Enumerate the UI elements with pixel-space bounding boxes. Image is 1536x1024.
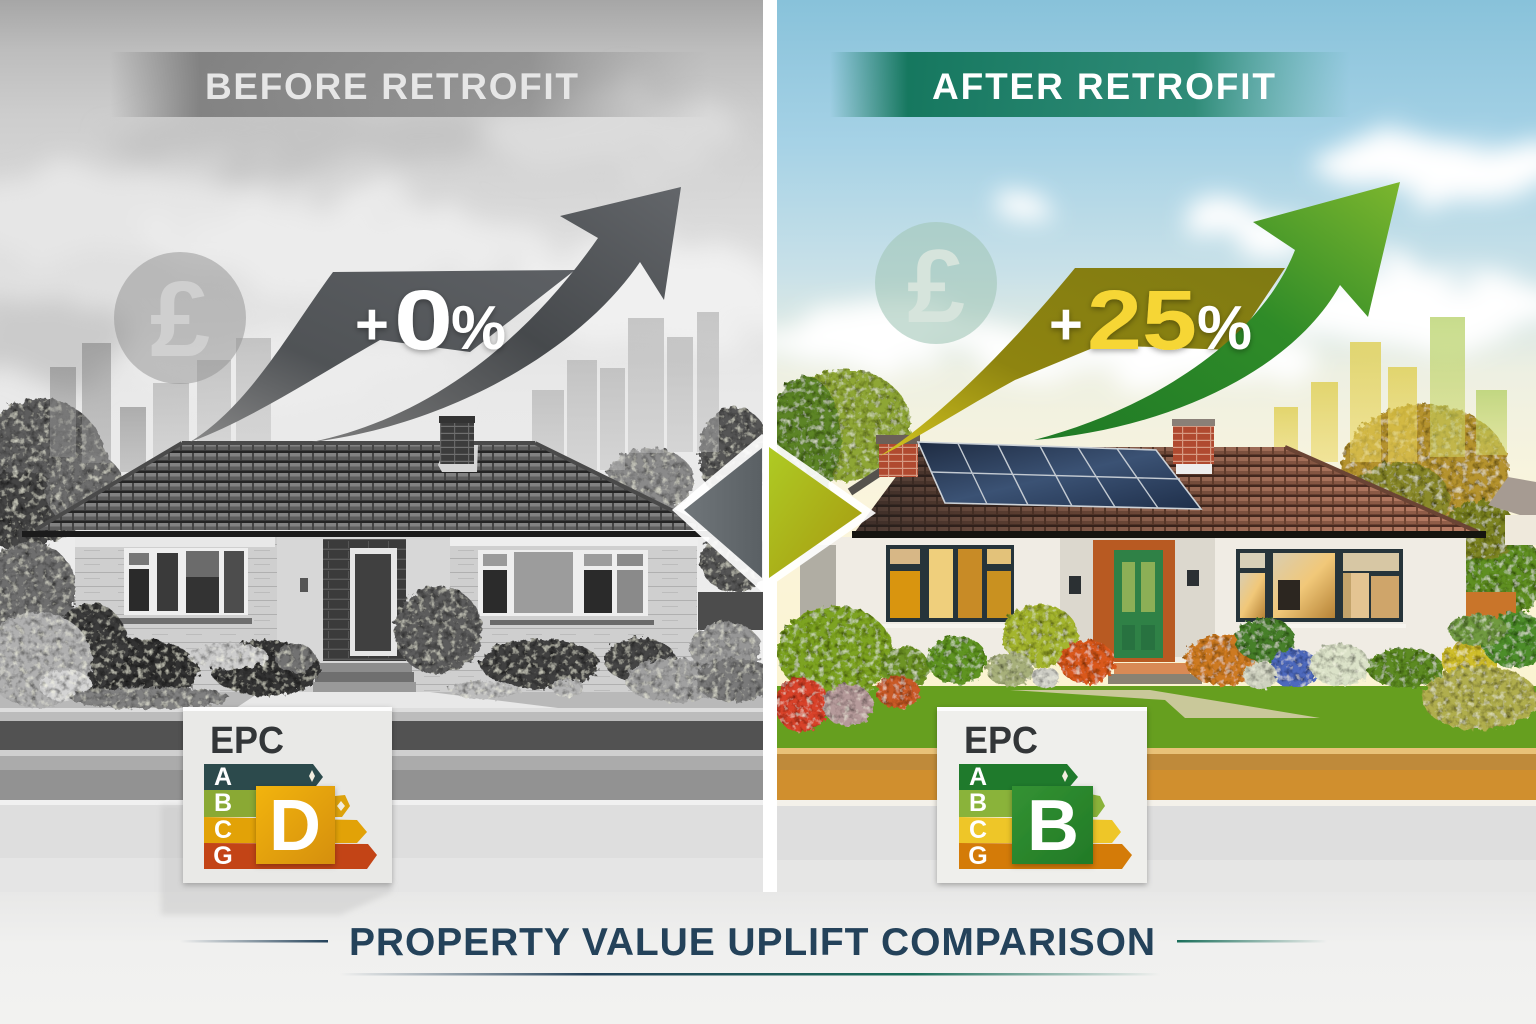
- panel header: after retrofit: AFTER RETROFIT: [932, 66, 1275, 107]
- left hip edge: [850, 447, 918, 492]
- bottom title strip background: [0, 892, 1536, 1024]
- wall lamp: [300, 578, 308, 592]
- card highlight: [937, 707, 1147, 711]
- flower beds: [775, 604, 1536, 732]
- panel header: before retrofit: [110, 52, 710, 117]
- rating bars: [204, 763, 377, 870]
- roof hip edge: [35, 443, 712, 530]
- rating badge D: [256, 786, 335, 866]
- upper ribbon: [880, 268, 1285, 456]
- EPC card: rating D: [183, 707, 392, 883]
- left sill: [882, 624, 1018, 628]
- pound coin icon: £: [150, 258, 210, 379]
- value label: [355, 273, 506, 367]
- soffit: [75, 537, 275, 547]
- right rule: [1177, 940, 1327, 942]
- green front door: [1114, 550, 1163, 658]
- panel: before retrofit: [0, 0, 780, 894]
- steps: [313, 663, 416, 692]
- side extension shade: [800, 545, 836, 620]
- rating badge B: [1012, 786, 1093, 866]
- fascia: [852, 531, 1486, 538]
- value label: %: [1197, 294, 1252, 363]
- central plain wall: [277, 537, 450, 667]
- blue sunny sky: [750, 0, 1536, 720]
- arrow body: [312, 187, 681, 442]
- wall: [75, 537, 697, 692]
- lawn and path: [777, 686, 1536, 750]
- rating badge D: D: [269, 786, 321, 866]
- left chimney: [876, 435, 920, 477]
- chimney: [438, 416, 478, 472]
- foreground orange bands: [777, 748, 1536, 894]
- right soffit: [450, 537, 698, 546]
- wooden fence: [1458, 592, 1516, 622]
- centre arrow diamond: [672, 434, 876, 592]
- translucent bar chart: [1274, 317, 1507, 462]
- front steps: [1108, 663, 1202, 684]
- EPC label: EPC: [210, 720, 284, 762]
- value label: +: [1049, 292, 1083, 357]
- value label: 25: [1087, 273, 1197, 367]
- roof shade: [855, 447, 1478, 532]
- title text: PROPERTY VALUE UPLIFT COMPARISON: [349, 921, 1155, 964]
- rating bars: A: [214, 763, 232, 791]
- rating bars: G: [213, 842, 233, 870]
- left window: [886, 545, 1014, 622]
- door: [350, 548, 397, 656]
- right window: [478, 550, 648, 616]
- arrow body: [1034, 182, 1400, 440]
- panel: after retrofit: [750, 0, 1536, 894]
- rating bars: C: [969, 816, 987, 844]
- left sill: [118, 618, 252, 624]
- value label: %: [451, 294, 506, 363]
- pound coin icon: [114, 252, 246, 384]
- left window: [124, 548, 248, 615]
- right window: [1236, 549, 1403, 622]
- right chimney: [1172, 419, 1215, 474]
- right sill: [1240, 624, 1406, 628]
- rating bars: B: [969, 789, 987, 817]
- wall: [806, 537, 1466, 662]
- uplift arrow: plus 0 percent: [190, 187, 681, 442]
- pound coin icon: £: [907, 229, 965, 345]
- panel header: after retrofit: [830, 52, 1350, 117]
- uplift arrow: plus 25 percent: [880, 182, 1400, 456]
- door surround: [1093, 540, 1175, 662]
- solar panels: [918, 442, 1201, 509]
- bungalow in greyscale: [22, 416, 722, 692]
- roof: [35, 443, 712, 530]
- pound coin icon: [875, 222, 997, 345]
- rating bars: C: [214, 816, 232, 844]
- background trees: [0, 398, 771, 592]
- background trees: [769, 369, 1536, 620]
- central shaded wall: [1060, 537, 1215, 657]
- panel header: before retrofit: BEFORE RETROFIT: [205, 66, 578, 107]
- left rule: [180, 940, 328, 942]
- EPC label: EPC: [964, 720, 1038, 762]
- fence: [698, 592, 763, 630]
- underline: [340, 973, 1160, 976]
- centre divider: [763, 0, 777, 892]
- rating bars: [959, 763, 1132, 870]
- upper ribbon: [190, 270, 575, 442]
- grey cloudy sky: [0, 0, 763, 404]
- rating bars: A: [969, 763, 987, 791]
- neighbouring house: [1488, 477, 1536, 545]
- shrubs: [0, 542, 775, 709]
- rating bars: B: [214, 789, 232, 817]
- value label: +: [355, 292, 389, 357]
- ground and pavement: [0, 692, 763, 712]
- wall lamps: [1069, 570, 1199, 594]
- card highlight: [183, 707, 392, 711]
- value label: 0: [394, 273, 453, 367]
- rating badge B: B: [1027, 786, 1079, 866]
- value label: [1049, 273, 1252, 367]
- foreground bands: [0, 712, 763, 894]
- door surround: [323, 539, 406, 661]
- right hip edge: [1285, 447, 1478, 532]
- roof: [855, 447, 1478, 532]
- rating bars: G: [968, 842, 988, 870]
- retrofitted bungalow: [800, 419, 1486, 684]
- faded bar chart: [50, 312, 719, 475]
- fascia: [22, 531, 722, 537]
- card shadow strip: [161, 805, 392, 915]
- right sill: [490, 620, 654, 625]
- EPC card: rating B: [937, 707, 1147, 883]
